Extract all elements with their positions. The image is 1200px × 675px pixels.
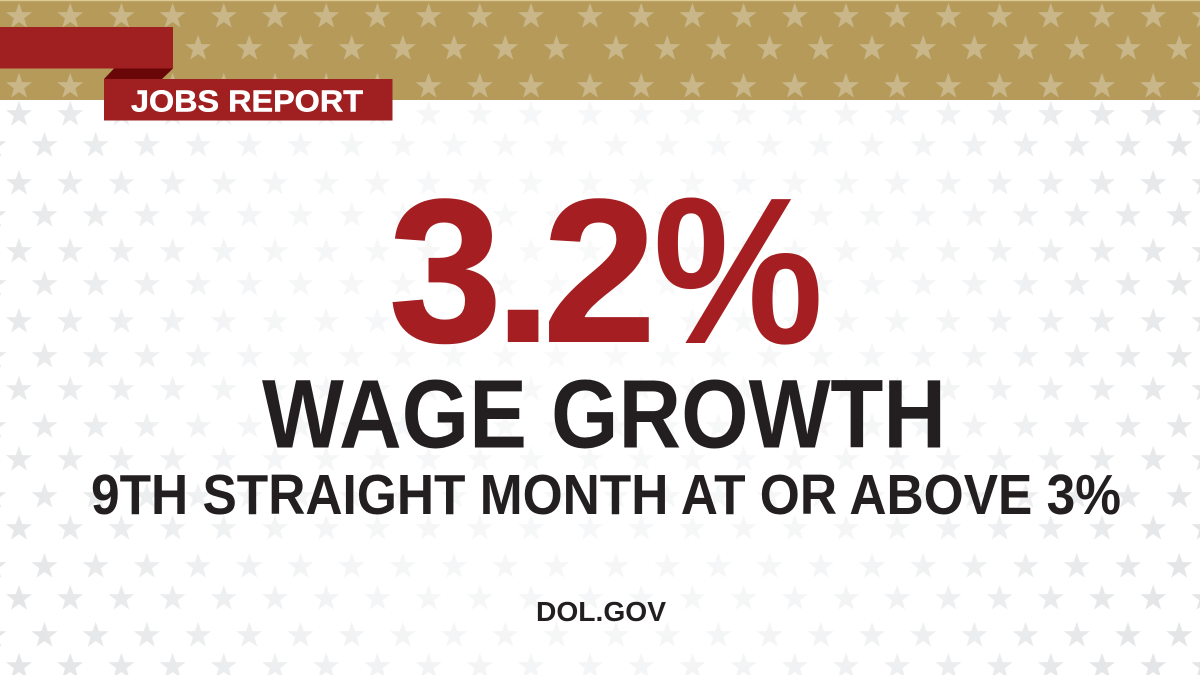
ribbon upper strip [0, 27, 173, 68]
percent sign: % [653, 153, 824, 388]
ribbon: jobs report banner [0, 27, 392, 120]
heading: wage growth: WAGE GROWTH [262, 360, 946, 468]
ribbon fold [104, 68, 173, 79]
digits: 3.2 [389, 158, 656, 385]
headline statistic: 3.2% [389, 153, 824, 388]
subheading: 9TH STRAIGHT MONTH AT OR ABOVE 3% [91, 463, 1121, 527]
gold header band with stars [0, 0, 1200, 100]
ribbon label: JOBS REPORT [131, 84, 363, 118]
ribbon lower strip [104, 79, 392, 120]
source: dol.gov: DOL.GOV [536, 596, 666, 627]
